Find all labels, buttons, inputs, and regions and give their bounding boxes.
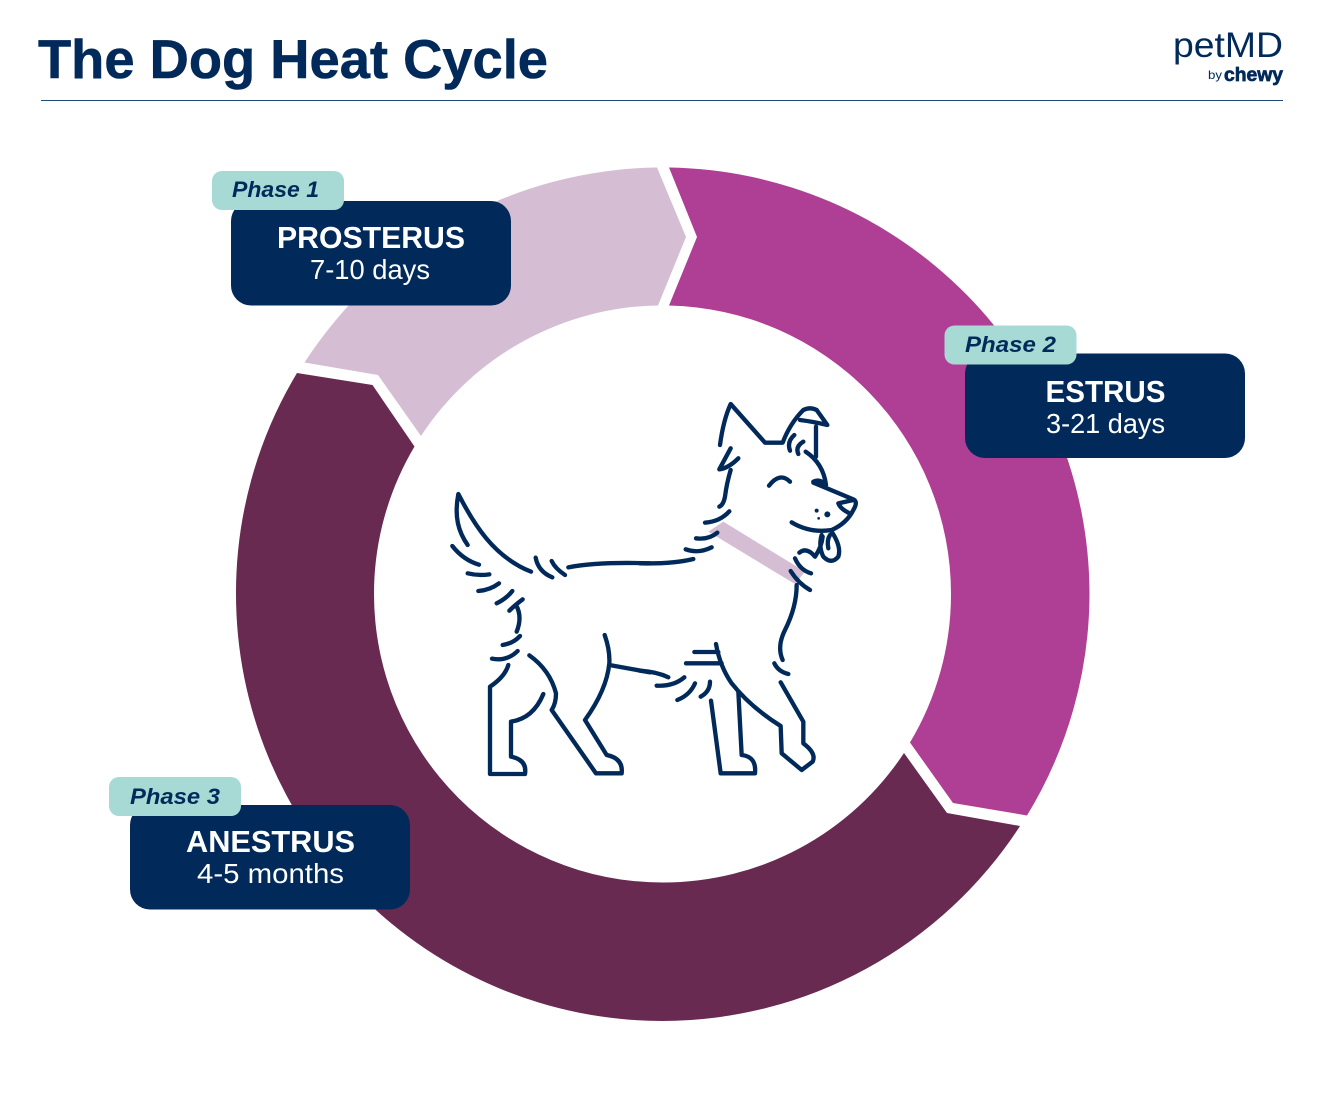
donut segment: phase 3 anestrus xyxy=(236,373,1020,1021)
logo: petMD by chewy: petMD xyxy=(1173,26,1283,65)
donut segment: phase 2 estrus xyxy=(669,168,1090,816)
label: phase 3 anestrus xyxy=(109,777,410,910)
label: phase 1 prosterus xyxy=(212,171,511,306)
dog front half xyxy=(640,404,856,773)
logo: petMD by chewy xyxy=(1173,26,1283,86)
label: phase 3 anestrus: Phase 3 xyxy=(130,784,220,809)
icon: dog with collar xyxy=(452,404,856,774)
label: phase 1 prosterus: 7-10 days xyxy=(310,254,430,285)
label: phase 1 prosterus: PROSTERUS xyxy=(277,220,465,255)
label: phase 1 prosterus: Phase 1 xyxy=(232,177,319,202)
label: phase 2 estrus xyxy=(944,326,1245,458)
donut segment: phase 1 prosterus xyxy=(304,168,686,436)
label: phase 3 anestrus: ANESTRUS xyxy=(186,824,355,859)
label: phase 2 estrus: 3-21 days xyxy=(1046,408,1165,439)
dog rear half xyxy=(452,494,650,774)
title: The Dog Heat Cycle xyxy=(38,28,548,90)
logo: petMD by chewy: by xyxy=(1208,68,1222,82)
label: phase 3 anestrus: 4-5 months xyxy=(197,858,344,889)
label: phase 2 estrus: ESTRUS xyxy=(1046,374,1166,409)
logo: petMD by chewy: chewy xyxy=(1224,65,1283,86)
label: phase 2 estrus: Phase 2 xyxy=(965,332,1057,357)
